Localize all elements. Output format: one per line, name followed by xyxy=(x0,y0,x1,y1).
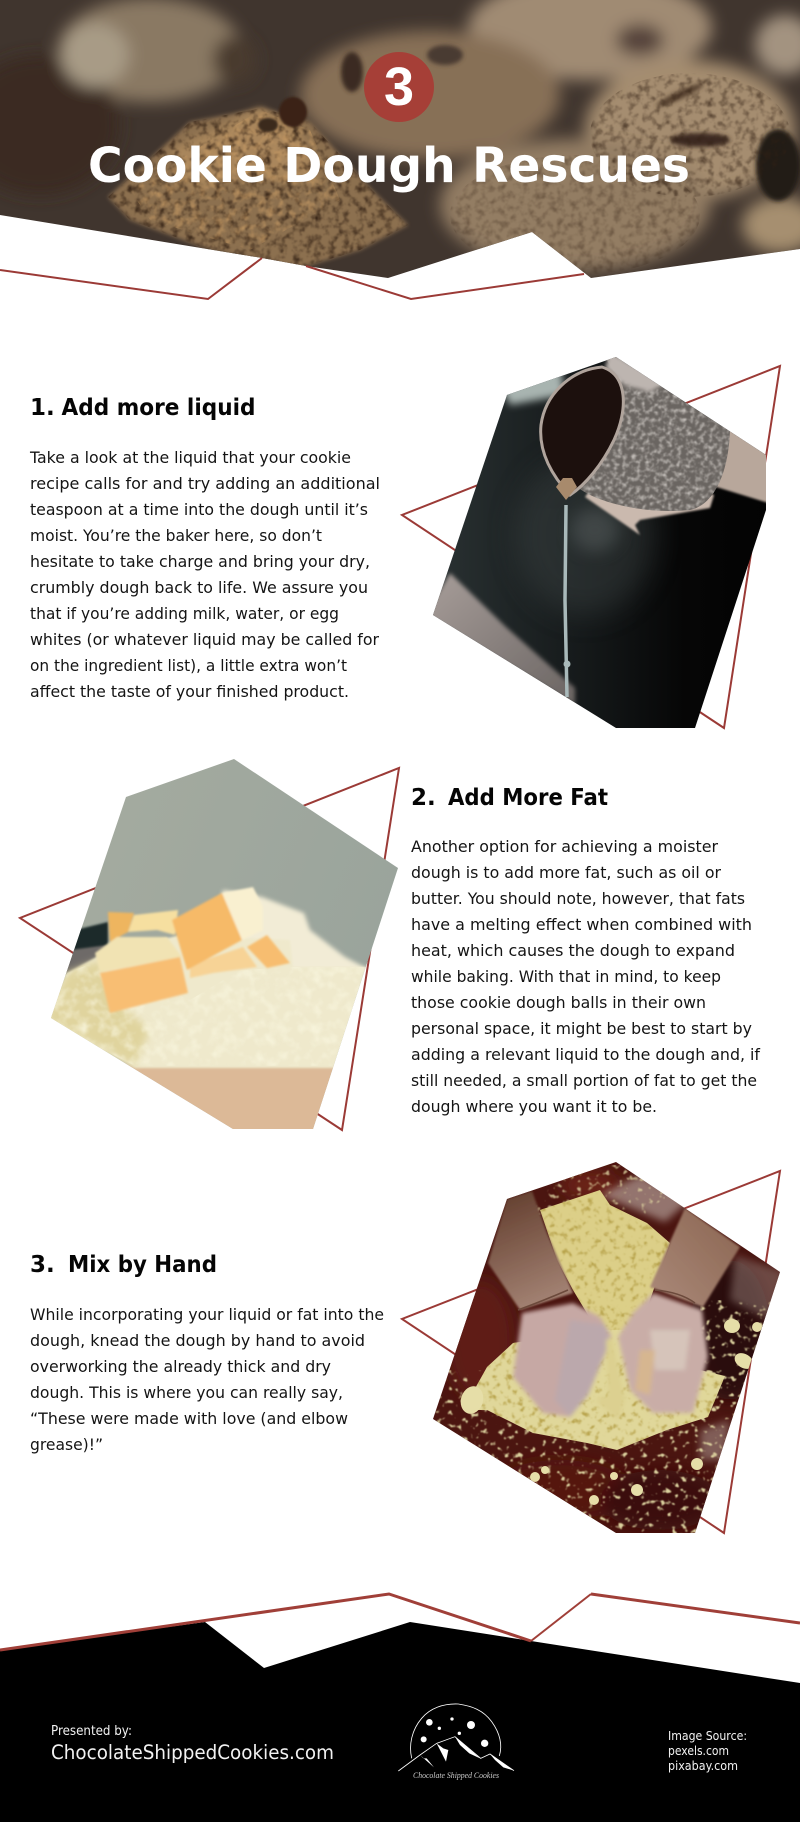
body 2: have a melting effect when combined with xyxy=(411,915,752,934)
dough mound xyxy=(540,1190,670,1335)
body 3: dough. This is where you can really say, xyxy=(30,1383,343,1402)
body 3: dough, knead the dough by hand to avoid xyxy=(30,1331,365,1350)
footer image source: Image Source: xyxy=(668,1728,747,1743)
section 1 text: add more liquid xyxy=(29,395,380,701)
body 1: crumbly dough back to life. We assure you xyxy=(30,578,368,597)
photo 2: butter on flour xyxy=(45,755,405,1139)
triangle outline 1 xyxy=(402,366,780,728)
body 1: hesitate to take charge and bring your dry, xyxy=(30,552,370,571)
footer presented by: Presented by: xyxy=(51,1724,132,1739)
heading 1: Add more liquid xyxy=(62,395,256,421)
footer black shape xyxy=(0,1622,800,1822)
header photo: cookies xyxy=(0,0,800,290)
triangle outline 2 xyxy=(20,768,399,1130)
heading 3: Mix by Hand xyxy=(68,1252,217,1278)
body 1: teaspoon at a time into the dough until it’s xyxy=(30,500,368,519)
header decorative red zigzag line xyxy=(0,258,584,299)
number badge xyxy=(364,52,434,122)
footer image source xyxy=(668,1728,747,1773)
body 1: on the ingredient list), a little extra won’t xyxy=(30,656,347,675)
foreground cookie xyxy=(108,97,408,268)
heading 2: Add More Fat xyxy=(448,785,608,811)
triangle outline 3 xyxy=(402,1171,780,1533)
heading 1: 1. xyxy=(30,395,55,421)
body 2: adding a relevant liquid to the dough and, if xyxy=(411,1045,760,1064)
body 1: Take a look at the liquid that your cookie xyxy=(29,448,351,467)
footer presented by xyxy=(51,1724,334,1764)
body 2: still needed, a small portion of fat to get the xyxy=(411,1071,757,1090)
footer red zigzag line xyxy=(0,1594,800,1650)
footer presented by: ChocolateShippedCookies.com xyxy=(51,1741,334,1764)
body 1: recipe calls for and try adding an additional xyxy=(30,474,380,493)
arms xyxy=(488,1191,573,1310)
body 2 xyxy=(411,837,760,1116)
footer image source: pixabay.com xyxy=(668,1758,738,1773)
photo 1: milk poured from cup xyxy=(425,350,775,735)
body 2: Another option for achieving a moister xyxy=(411,837,718,856)
heading 2: 2. xyxy=(411,785,436,811)
body 1: moist. You’re the baker here, so don’t xyxy=(30,526,322,545)
butter cubes xyxy=(95,887,290,1013)
body 1 xyxy=(29,448,380,701)
body 2: personal space, it might be best to start by xyxy=(411,1019,752,1038)
photo 3: hands kneading dough xyxy=(430,1155,785,1540)
title: Cookie Dough Rescues xyxy=(88,138,690,194)
body 1: that if you’re adding milk, water, or egg xyxy=(30,604,339,623)
body 2: while baking. With that in mind, to keep xyxy=(411,967,721,986)
hands xyxy=(513,1293,708,1420)
body 2: dough where you want it to be. xyxy=(411,1097,657,1116)
body 3: “These were made with love (and elbow xyxy=(30,1409,348,1428)
body 2: dough is to add more fat, such as oil or xyxy=(411,863,721,882)
body 2: butter. You should note, however, that fats xyxy=(411,889,745,908)
body 3 xyxy=(30,1305,384,1454)
body 2: those cookie dough balls in their own xyxy=(411,993,706,1012)
footer logo xyxy=(398,1704,514,1780)
heading 3: 3. xyxy=(30,1252,55,1278)
number badge: 3 xyxy=(384,57,414,117)
body 1: whites (or whatever liquid may be called for xyxy=(30,630,379,649)
body 3: grease)!” xyxy=(30,1435,103,1454)
body 2: heat, which causes the dough to expand xyxy=(411,941,735,960)
footer logo: Chocolate Shipped Cookies xyxy=(413,1770,500,1780)
section 2 text: add more fat xyxy=(411,785,760,1116)
section 3 text: mix by hand xyxy=(30,1252,384,1454)
footer image source: pexels.com xyxy=(668,1743,729,1758)
body 3: overworking the already thick and dry xyxy=(30,1357,331,1376)
body 1: affect the taste of your finished product. xyxy=(30,682,349,701)
body 3: While incorporating your liquid or fat into the xyxy=(30,1305,384,1324)
